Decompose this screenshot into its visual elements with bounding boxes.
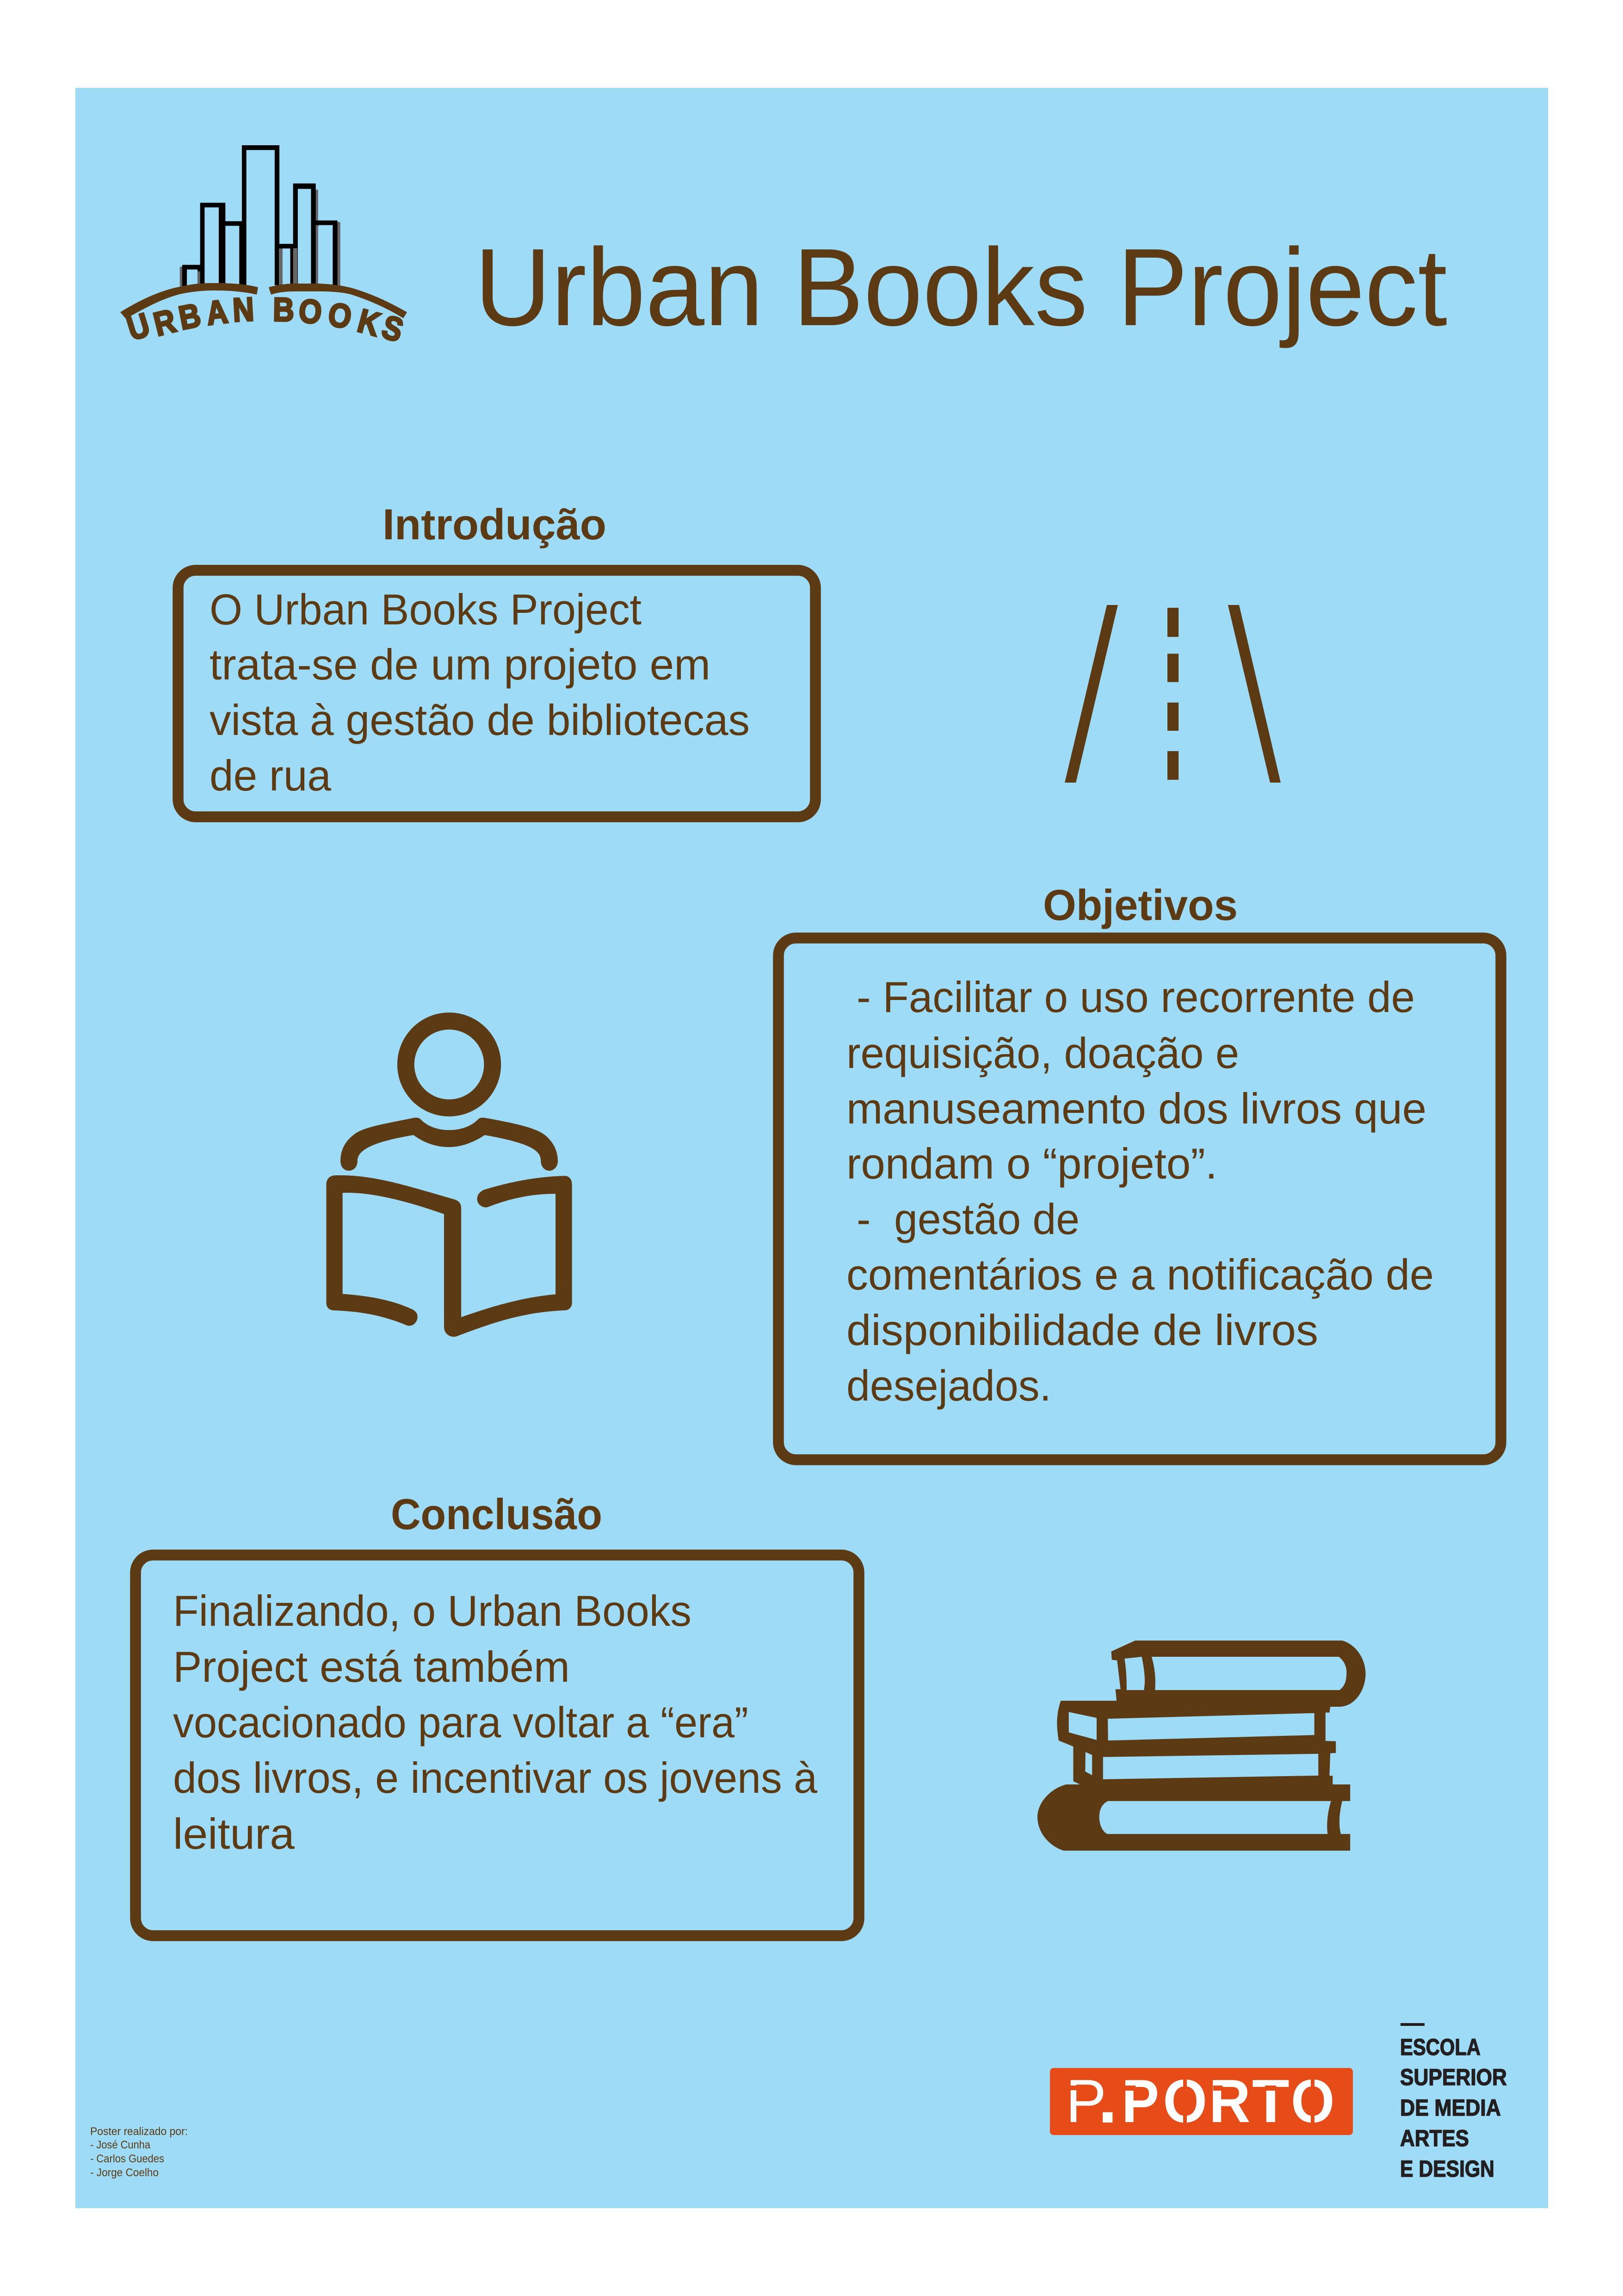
logo wordmark: K [354, 302, 384, 343]
school name: ESCOLA [1400, 2034, 1481, 2060]
text: introdução: vista à gestão de bibliotecas [210, 696, 750, 744]
text: introdução [210, 585, 750, 800]
logo wordmark: O [326, 296, 354, 336]
text: objetivos: desejados. [846, 1361, 1051, 1410]
school name: DE MEDIA [1400, 2095, 1501, 2121]
logo wordmark: A [204, 293, 230, 332]
frame: objetivos [778, 938, 1501, 1460]
logo wordmark [123, 291, 407, 349]
text: conclusão: leitura [173, 1809, 295, 1858]
text: objetivos: - gestão de [857, 1195, 1080, 1243]
logo: P.PORTO: P [1066, 2067, 1106, 2135]
icon: person reading a book [326, 1012, 572, 1337]
shoulders [340, 1117, 558, 1171]
logo wordmark: S [378, 309, 407, 349]
text: objetivos: comentários e a notificação de [846, 1250, 1434, 1299]
text: objetivos: rondam o “projeto”. [846, 1139, 1217, 1188]
credits: - José Cunha [90, 2139, 151, 2151]
heading: Conclusão: Conclusão [391, 1490, 602, 1538]
logo: P.PORTO: T [1252, 2067, 1290, 2135]
panel: objetivos [778, 881, 1501, 1460]
logo: Urban Books [120, 145, 407, 349]
panel: conclusão [136, 1490, 859, 1936]
school name: SUPERIOR [1400, 2064, 1507, 2090]
logo: P.PORTO: R [1209, 2067, 1251, 2136]
logo wordmark: B [176, 297, 204, 337]
icon: road [1065, 605, 1281, 783]
text: conclusão: Project está também [173, 1642, 570, 1691]
school name [1400, 2023, 1507, 2182]
text: conclusão: Finalizando, o Urban Books [173, 1586, 691, 1635]
text: conclusão [173, 1586, 818, 1858]
text: introdução: O Urban Books Project [210, 585, 642, 634]
text: objetivos: requisição, doação e [846, 1029, 1239, 1077]
head [397, 1012, 501, 1117]
school name: E DESIGN [1400, 2156, 1494, 2182]
school name: ARTES [1400, 2125, 1469, 2151]
text: conclusão: vocacionado para voltar a “era” [173, 1698, 748, 1747]
heading: Introdução: Introdução [383, 500, 606, 549]
logo wordmark: U [123, 306, 154, 348]
frame: introdução [178, 570, 815, 817]
logo: P.PORTO [1050, 2060, 1353, 2137]
text: objetivos: - Facilitar o uso recorrente de [857, 973, 1415, 1021]
title: Urban Books Project [475, 226, 1447, 349]
text: introdução: de rua [210, 751, 332, 800]
credits: - Jorge Coelho [90, 2166, 159, 2179]
logo arcs [120, 283, 407, 319]
text: conclusão: dos livros, e incentivar os jovens à [173, 1753, 818, 1802]
panel: introdução [178, 500, 815, 817]
heading: Objetivos: Objetivos [1043, 881, 1238, 929]
logo: P.PORTO: . [1098, 2060, 1117, 2137]
logo wordmark: R [150, 302, 179, 343]
logo: P.PORTO: O [1291, 2067, 1334, 2135]
logo wordmark: N [232, 291, 255, 329]
text: objetivos: manuseamento dos livros que [846, 1084, 1426, 1133]
credits: - Carlos Guedes [90, 2153, 164, 2165]
credits: Poster realizado por: [90, 2125, 188, 2138]
logo: P.PORTO: O [1163, 2068, 1207, 2136]
logo: P.PORTO: P [1122, 2067, 1159, 2135]
logo wordmark: O [297, 292, 323, 331]
text: objetivos: disponibilidade de livros [846, 1306, 1318, 1354]
frame: conclusão [136, 1555, 859, 1936]
icon: stack of books [1037, 1641, 1365, 1851]
logo wordmark: B [272, 291, 295, 328]
text: objetivos [846, 973, 1434, 1410]
open book [326, 1175, 572, 1337]
text: introdução: trata-se de um projeto em [210, 640, 710, 689]
logo skyline [180, 145, 340, 287]
credits [90, 2125, 188, 2179]
